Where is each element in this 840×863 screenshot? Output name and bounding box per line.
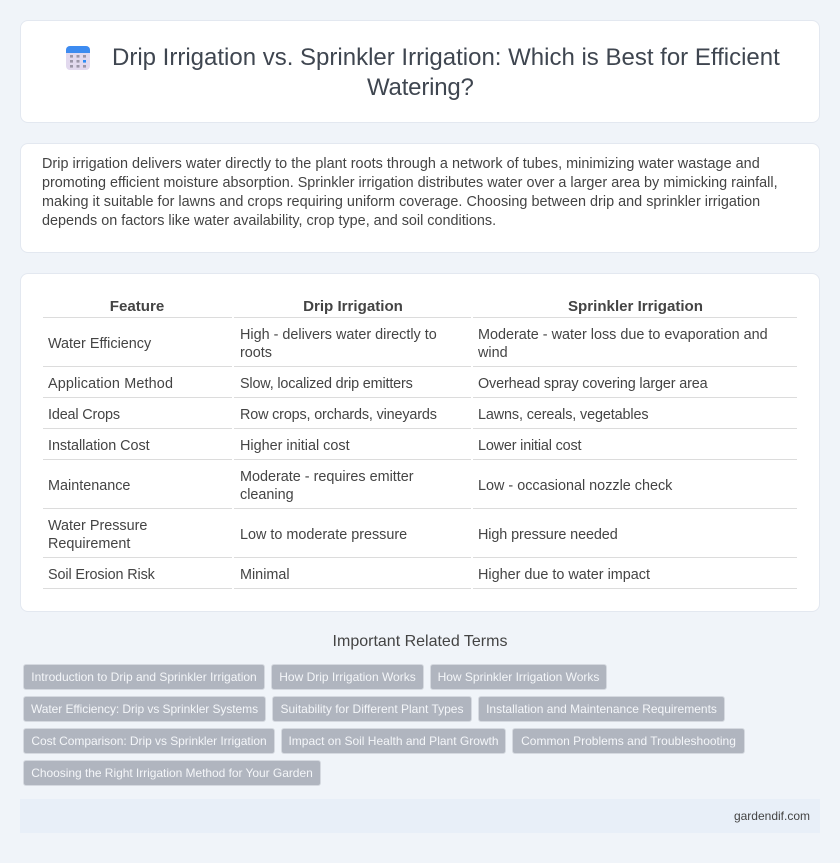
row: water efficiency: Moderate - water loss due to evaporation and: [478, 327, 768, 343]
row: maintenance: Moderate - requires emitter: [240, 469, 414, 485]
footer bar: [20, 799, 820, 833]
row: soil erosion risk: Minimal: [240, 567, 290, 583]
row: water efficiency: wind: [478, 345, 508, 361]
row: maintenance: cleaning: [240, 487, 294, 503]
row: water pressure requirement: Low to moderate pressure: [240, 527, 407, 543]
row: water pressure requirement: High pressure needed: [478, 527, 618, 543]
row: water pressure requirement: [48, 518, 618, 552]
row: soil erosion risk: Soil Erosion Risk: [48, 567, 155, 583]
row: ideal crops: [48, 407, 648, 423]
related terms tags: Introduction to Drip and Sprinkler Irrigation: [31, 670, 257, 684]
row: maintenance: Maintenance: [48, 478, 130, 494]
intro text panel: [20, 143, 820, 253]
row: water efficiency: [48, 327, 768, 361]
row: maintenance: Low - occasional nozzle check: [478, 478, 672, 494]
row: soil erosion risk: Higher due to water impact: [478, 567, 650, 583]
related terms tags: Impact on Soil Health and Plant Growth: [288, 734, 499, 748]
title: Drip Irrigation vs. Sprinkler Irrigation: Which is Best for Efficient: [112, 44, 780, 71]
intro paragraph: making it suitable for lawns and crops requiring uniform coverage. Choosing between drip and sprinkler irrigation: [42, 194, 760, 210]
table header: Sprinkler Irrigation: [568, 298, 703, 315]
intro paragraph: [42, 156, 778, 229]
row: water efficiency: High - delivers water directly to: [240, 327, 437, 343]
row: ideal crops: Ideal Crops: [48, 407, 120, 423]
icon: calendar: [66, 46, 90, 70]
comparison table panel: [20, 273, 820, 612]
row: water pressure requirement: Requirement: [48, 536, 130, 552]
related terms tags: How Drip Irrigation Works: [279, 670, 416, 684]
row: installation cost: Installation Cost: [48, 438, 150, 454]
row: water efficiency: Water Efficiency: [48, 336, 151, 352]
intro paragraph: Drip irrigation delivers water directly to the plant roots through a network of tubes, minimizing water wastage and: [42, 156, 760, 172]
row: installation cost: Higher initial cost: [240, 438, 350, 454]
title: [112, 44, 780, 101]
related terms tags: Suitability for Different Plant Types: [280, 702, 463, 716]
row: application method: Overhead spray covering larger area: [478, 376, 707, 392]
row: application method: Application Method: [48, 376, 173, 392]
related terms tags: Common Problems and Troubleshooting: [521, 734, 736, 748]
footer source: gardendif.com: [734, 809, 810, 823]
related terms tags: Choosing the Right Irrigation Method for Your Garden: [31, 766, 313, 780]
row: application method: [48, 376, 708, 392]
header panel: [20, 20, 820, 123]
row: soil erosion risk: [48, 567, 650, 583]
row: water efficiency: roots: [240, 345, 272, 361]
row: installation cost: [48, 438, 582, 454]
related terms tags: Cost Comparison: Drip vs Sprinkler Irrigation: [31, 734, 267, 748]
row: application method: Slow, localized drip emitters: [240, 376, 413, 392]
related terms heading: Important Related Terms: [333, 633, 507, 650]
related terms tags: Water Efficiency: Drip vs Sprinkler Systems: [31, 702, 258, 716]
row: installation cost: Lower initial cost: [478, 438, 581, 454]
row: maintenance: [48, 469, 672, 503]
related terms tags: Installation and Maintenance Requirements: [486, 702, 717, 716]
table header: [110, 298, 703, 315]
related terms tags: How Sprinkler Irrigation Works: [438, 670, 599, 684]
related terms tags: [23, 664, 745, 786]
table header: Drip Irrigation: [303, 298, 403, 315]
intro paragraph: depends on factors like water availability, crop type, and soil conditions.: [42, 213, 496, 229]
table header: Feature: [110, 298, 164, 315]
title: Watering?: [367, 74, 474, 101]
intro paragraph: promoting efficient moisture absorption. Sprinkler irrigation distributes water over a larger area by mimicking rainfall,: [42, 175, 778, 191]
row: water pressure requirement: Water Pressure: [48, 518, 147, 534]
row: ideal crops: Lawns, cereals, vegetables: [478, 407, 648, 423]
row: ideal crops: Row crops, orchards, vineyards: [240, 407, 437, 423]
